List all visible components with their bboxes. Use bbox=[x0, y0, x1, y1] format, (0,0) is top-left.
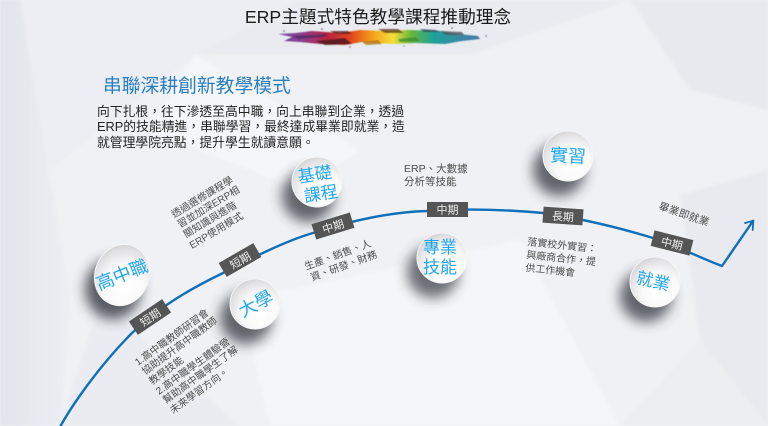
note: internship bbox=[525, 235, 598, 279]
note: high school: 1.高中職教師研習會 bbox=[132, 306, 211, 368]
note: internship: 落實校外實習： bbox=[527, 235, 598, 255]
phase tag: 短期 1: 短期 bbox=[137, 305, 163, 329]
note: high school: 未來學習方向。 bbox=[167, 365, 231, 416]
node: 基礎課程: 基礎 bbox=[297, 163, 333, 187]
heading: 串聯深耕創新教學模式 bbox=[103, 75, 291, 96]
phase tag: 長期 bbox=[542, 207, 584, 225]
node: 實習 bbox=[533, 131, 593, 196]
note: professional skills bbox=[404, 162, 468, 188]
node: 大學: 大學 bbox=[235, 287, 277, 321]
node: 高中職 bbox=[85, 237, 158, 319]
growth curve with arrow bbox=[60, 210, 753, 426]
phase tag: 中期 1: 中期 bbox=[321, 218, 346, 236]
note: university: 習並加深ERP相 bbox=[175, 183, 242, 231]
phase tag: 中期 3 bbox=[651, 230, 693, 256]
node: 高中職: 高中職 bbox=[93, 256, 151, 294]
node: 就業: 就業 bbox=[634, 268, 672, 295]
intro text block bbox=[97, 104, 405, 150]
note: university: ERP使用模式 bbox=[187, 209, 245, 252]
node: 專業技能: 技能 bbox=[423, 258, 457, 277]
note: university: 透過選修課程學 bbox=[169, 173, 236, 221]
node: 實習: 實習 bbox=[550, 145, 586, 167]
node: 基礎課程 bbox=[282, 157, 342, 222]
note: internship: 供工作機會 bbox=[525, 261, 576, 279]
intro text block: 就管理學院亮點，提升學生就讀意願。 bbox=[97, 135, 315, 150]
note: internship: 與廠商合作，提 bbox=[526, 248, 597, 268]
note: high school: 協助提升高中職教師 bbox=[139, 314, 220, 377]
note: employment: 畢業即就業 bbox=[657, 200, 711, 229]
note: high school bbox=[132, 306, 241, 416]
note: basic courses: 資、研發、財務 bbox=[309, 248, 379, 284]
node: 專業技能 bbox=[407, 233, 467, 298]
intro text block: 向下扎根，往下滲透至高中職，向上串聯到企業，透過 bbox=[97, 104, 404, 119]
note: basic courses: 生產、銷售、人 bbox=[303, 237, 373, 273]
note: university: 關知識與進階 bbox=[181, 199, 239, 241]
node: 專業技能: 專業 bbox=[423, 238, 457, 257]
node: 基礎課程: 課程 bbox=[303, 182, 339, 206]
note: high school: 2.高中職學生體驗營 bbox=[153, 335, 232, 397]
phase tag: 中期 2: 中期 bbox=[436, 204, 458, 216]
intro text block: ERP的技能精進，串聯學習，最終達成畢業即就業，造 bbox=[97, 119, 405, 134]
phase tag: 中期 2 bbox=[427, 202, 468, 217]
node: 大學 bbox=[220, 279, 280, 344]
phase tag: 中期 1 bbox=[312, 213, 354, 239]
paint splash under title bbox=[278, 27, 487, 48]
note: basic courses bbox=[303, 237, 379, 284]
phase tag: 中期 3: 中期 bbox=[660, 235, 684, 253]
phase tag: 長期: 長期 bbox=[552, 210, 574, 224]
phase tag: 短期 2: 短期 bbox=[227, 249, 253, 272]
note: professional skills: ERP、大數據 bbox=[404, 162, 468, 175]
note: professional skills: 分析等技能 bbox=[404, 175, 457, 188]
phase tag: 短期 1 bbox=[129, 299, 171, 335]
note: university bbox=[169, 173, 245, 252]
note: high school: 教學技能 bbox=[146, 353, 186, 387]
title: ERP主題式特色教學課程推動理念 bbox=[245, 7, 511, 27]
note: high school: 幫助高中職學生了解 bbox=[160, 343, 241, 406]
node: 就業 bbox=[620, 257, 680, 322]
phase tag: 短期 2 bbox=[219, 243, 261, 277]
